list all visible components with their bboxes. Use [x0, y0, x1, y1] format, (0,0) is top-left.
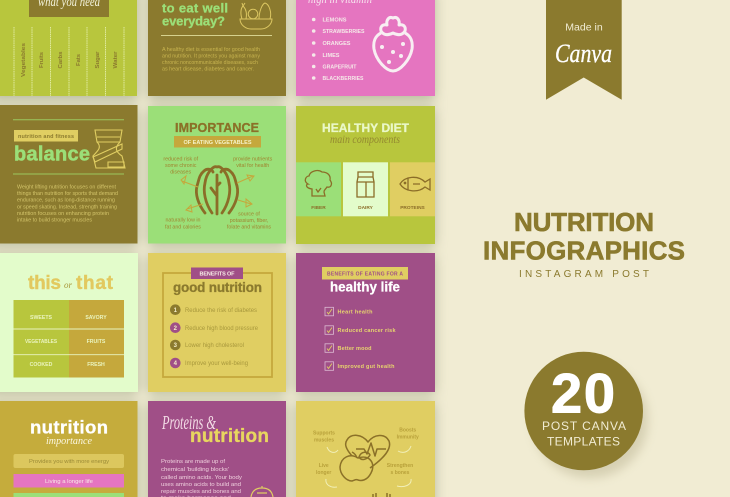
ribbon: made in canva: Made in	[565, 22, 603, 34]
text: protein paragraph: Proteins are made up of	[161, 459, 225, 465]
fruit list: LIMES	[322, 53, 340, 59]
component: proteins: PROTEINS	[400, 205, 426, 211]
benefit labels: provide nutrients	[233, 156, 273, 162]
numbered list	[170, 304, 259, 368]
checklist: Reduced cancer risk	[338, 328, 396, 334]
fruit list: ORANGES	[322, 41, 351, 47]
food group labels: Vegetables	[21, 43, 27, 77]
heading: good nutrition: good nutrition	[173, 280, 262, 295]
food group labels: Fats	[76, 54, 82, 66]
icon: leafy vegetable	[196, 167, 238, 214]
panel: nutrition importance	[0, 401, 138, 497]
numbered list: 4	[174, 361, 178, 367]
ribbon: made in canva	[546, 0, 622, 100]
benefit labels: Live	[319, 463, 329, 469]
benefit labels: naturally low in	[165, 218, 201, 224]
comparison table: COOKED	[30, 362, 53, 368]
text: balance paragraph: Weight lifting nutrition focuses on different	[17, 184, 117, 190]
heading: balance: balance	[14, 144, 90, 166]
decorative arcs	[326, 446, 411, 487]
panel: benefits of a healthy life	[296, 253, 435, 392]
partial heading	[373, 493, 390, 497]
panel: to eat well everyday	[148, 0, 286, 96]
subheading tag: OF EATING VEGETABLES	[184, 140, 252, 146]
icon: heart with apple	[340, 435, 390, 481]
text: protein paragraph	[161, 459, 242, 497]
row: longer life: Living a longer life	[45, 479, 93, 485]
badge: 20 post canva templates: TEMPLATES	[547, 435, 620, 449]
panel: what you need	[0, 0, 137, 96]
heading: importance: IMPORTANCE	[175, 121, 259, 135]
comparison table	[14, 300, 124, 378]
text: balance paragraph: intake to build stronger muscles	[17, 218, 92, 224]
heading: this or that	[28, 273, 114, 294]
icon: salad bowl	[240, 3, 272, 29]
comparison table: SWEETS	[30, 315, 52, 321]
numbered list: 3	[174, 343, 178, 349]
numbered list: 1	[174, 308, 178, 314]
text: body paragraph	[162, 47, 261, 72]
badge: 20 post canva templates	[524, 352, 648, 478]
fruit list: LEMONS	[322, 18, 347, 24]
checklist	[325, 307, 396, 370]
comparison table: FRUITS	[87, 339, 106, 345]
panel: this or that	[0, 253, 138, 392]
heading: nutrition: nutrition	[190, 426, 269, 447]
text: protein paragraph: called amino acids. Your body	[161, 475, 242, 481]
benefit labels: potassium, fiber,	[230, 218, 268, 224]
checklist: Heart health	[338, 310, 373, 316]
heading: this or that: that	[76, 273, 114, 294]
heading: healthy diet: HEALTHY DIET	[322, 121, 410, 135]
heading: this or that: or	[64, 280, 72, 290]
numbered list: Reduce high blood pressure	[185, 326, 259, 332]
arrows	[181, 175, 254, 212]
row: green bar	[14, 493, 124, 497]
tag: benefits of: BENEFITS OF	[200, 272, 235, 278]
text: balance paragraph: endurance, such as long-distance running	[17, 198, 115, 204]
comparison table: VEGETABLES	[25, 339, 57, 345]
heading: this or that: this	[28, 273, 61, 294]
icon: waist and tape measure	[93, 130, 125, 168]
benefit labels: folate and vitamins	[227, 224, 271, 230]
benefit labels: Supports	[313, 430, 335, 436]
benefit labels: Boosts	[399, 428, 416, 434]
heading: healthy life: healthy life	[330, 280, 400, 295]
script subheading: main components	[330, 132, 400, 146]
text: balance paragraph: things than nutrition for sports that demand	[17, 191, 118, 197]
numbered list: Lower high cholesterol	[185, 343, 244, 349]
food group labels: Carbs	[58, 52, 64, 68]
heading: everyday?	[162, 14, 225, 28]
benefit labels	[313, 428, 419, 476]
comparison table: SAVORY	[85, 315, 107, 321]
benefit labels: some chronic	[165, 163, 197, 169]
subtitle: INSTAGRAM POST	[519, 269, 649, 280]
benefit labels: muscles	[314, 438, 334, 444]
benefit labels: fat and calories	[165, 224, 201, 230]
text: body paragraph: as heart disease, diabetes and cancer.	[162, 66, 254, 72]
tag: nutrition and fitness: nutrition and fitness	[18, 134, 74, 140]
text: balance paragraph: or speed skating. Instead, strength training	[17, 204, 117, 210]
fruit list	[312, 18, 365, 82]
text: balance paragraph	[17, 184, 118, 224]
text: protein paragraph: repair muscles and bones and	[161, 489, 241, 495]
numbered list: Reduce the risk of diabetes	[185, 308, 257, 314]
comparison table: FRESH	[87, 362, 105, 368]
food group labels: Water	[113, 51, 119, 68]
text: balance paragraph: nutrition focuses on enhancing protein	[17, 211, 109, 217]
benefit labels: reduced risk of	[163, 156, 199, 162]
title: nutrition infographics	[483, 207, 685, 280]
numbered list: 2	[174, 326, 178, 332]
script heading: proteins: Proteins &	[161, 412, 216, 434]
panel: proteins and nutrition	[148, 401, 286, 497]
benefit labels: source of	[238, 212, 260, 218]
benefit labels: longer	[316, 470, 331, 476]
heading: nutrition: nutrition	[30, 417, 108, 438]
benefit labels: diseases	[170, 170, 192, 176]
checklist: Improved gut health	[338, 364, 395, 370]
component: fiber: FIBER	[311, 205, 326, 211]
benefit labels: Immunity	[397, 434, 419, 440]
text: body paragraph: and nutrition. It protects you against many	[162, 54, 261, 60]
ribbon: made in canva: Canva	[555, 39, 612, 68]
title: nutrition infographics: INFOGRAPHICS	[483, 236, 685, 266]
text: protein paragraph: chemical 'building blocks'	[161, 467, 229, 473]
benefit labels: Strengthen	[387, 463, 413, 469]
food group labels: Sugar	[95, 51, 101, 68]
panel: balance	[0, 105, 138, 244]
heading: to eat well	[162, 0, 228, 16]
panel: healthy diet main components	[296, 106, 435, 244]
fruit list: STRAWBERRIES	[322, 29, 365, 35]
panel: benefits of good nutrition	[148, 253, 286, 392]
numbered list: Improve your well-being	[185, 361, 248, 367]
badge: 20 post canva templates: 20	[551, 362, 615, 425]
fruit list: BLACKBERRIES	[322, 76, 364, 82]
heading	[162, 0, 228, 28]
fruit list: GRAPEFRUIT	[322, 64, 357, 70]
title: nutrition infographics: NUTRITION	[514, 207, 654, 237]
icon: strawberry	[374, 17, 412, 71]
component: dairy: DAIRY	[358, 205, 374, 211]
text: protein paragraph: uses amino acids to build and	[161, 482, 241, 488]
benefit labels: s bones	[391, 470, 410, 476]
icon: food dome	[251, 486, 273, 497]
panel: fruits list	[296, 0, 435, 96]
script subheading: importance	[46, 436, 93, 447]
badge: 20 post canva templates: POST CANVA	[542, 419, 626, 433]
panel: heart and apple benefits	[296, 401, 435, 497]
food group labels	[21, 43, 119, 77]
text: body paragraph: A healthy diet is essential for good health	[162, 47, 260, 53]
panel: importance of eating vegetables	[148, 106, 286, 244]
text: body paragraph: chronic noncommunicable diseases, such	[162, 60, 258, 66]
benefit labels: vital for health	[236, 163, 269, 169]
benefit labels	[163, 156, 273, 230]
row: more energy: Provides you with more energy	[29, 459, 109, 465]
tag: benefits of eating for a: BENEFITS OF EATING FOR A	[327, 271, 403, 277]
checklist: Better mood	[338, 346, 372, 352]
food group labels: Fruits	[39, 52, 45, 68]
